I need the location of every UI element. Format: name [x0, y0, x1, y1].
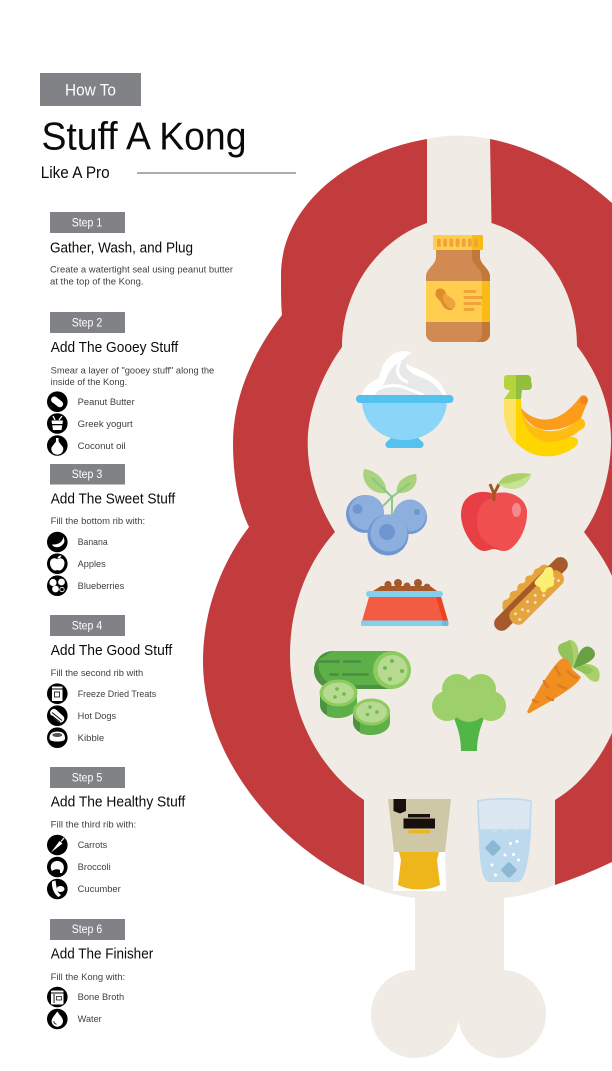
step 5	[47, 767, 186, 899]
item: peanut butter	[47, 391, 135, 412]
icon: water glass	[478, 799, 531, 882]
icon: peanut butter jar	[426, 235, 490, 342]
item: blueberries: Blueberries	[78, 581, 125, 591]
step 4: Add The Good Stuff	[51, 642, 173, 659]
kong beige interior and bone	[290, 136, 612, 1014]
title: Stuff A Kong	[42, 115, 246, 158]
icon: greek yogurt bowl	[356, 351, 454, 448]
step 5: Step 5	[72, 771, 102, 785]
kong silhouette	[203, 136, 612, 1058]
bone knob left	[371, 970, 459, 1058]
item: broccoli: Broccoli	[78, 862, 111, 872]
item: coconut oil	[47, 435, 126, 456]
step 3	[47, 464, 176, 596]
bone knob right	[458, 970, 546, 1058]
item: freeze dried treats: Freeze Dried Treats	[78, 689, 157, 699]
how to badge	[40, 73, 141, 106]
icon: kibble bowl	[361, 579, 448, 626]
item: apples: Apples	[78, 559, 106, 569]
step 1: Step 1	[72, 216, 102, 230]
step 2: Step 2	[72, 316, 102, 330]
kong red outer body	[203, 139, 612, 885]
icon: bone broth carton	[388, 799, 451, 891]
step 6: Add The Finisher	[51, 946, 153, 963]
step 3: Add The Sweet Stuff	[51, 490, 176, 507]
icon: cucumber	[314, 651, 411, 735]
icon: apple	[461, 473, 531, 551]
step 4: Step 4	[72, 619, 102, 633]
item: hot dogs: Hot Dogs	[78, 711, 117, 721]
step 1	[50, 212, 233, 287]
subtitle: Like A Pro	[41, 164, 110, 182]
item: banana: Banana	[78, 537, 108, 547]
item: water: Water	[78, 1014, 102, 1024]
step 4	[47, 615, 173, 748]
step 1: Create a watertight seal using peanut butter	[50, 265, 233, 275]
step 2: Add The Gooey Stuff	[51, 339, 179, 356]
item: bone broth: Bone Broth	[78, 992, 124, 1002]
step 2	[47, 312, 214, 456]
step 2: Smear a layer of "gooey stuff" along the	[51, 365, 214, 375]
step 3: Step 3	[72, 467, 102, 481]
icon: blueberries	[346, 469, 427, 556]
icon: banana	[504, 375, 588, 456]
item: greek yogurt	[47, 413, 133, 434]
step 1: Gather, Wash, and Plug	[50, 240, 193, 257]
item: coconut oil: Coconut oil	[78, 441, 126, 451]
step 6: Step 6	[72, 922, 102, 936]
icon: broccoli	[432, 674, 506, 751]
icon: carrot	[527, 640, 600, 714]
item: peanut butter: Peanut Butter	[78, 397, 135, 407]
step 3: Fill the bottom rib with:	[51, 516, 145, 526]
step 5: Add The Healthy Stuff	[51, 794, 186, 811]
step 4: Fill the second rib with	[51, 668, 143, 678]
item: cucumber: Cucumber	[78, 884, 121, 894]
step 2: inside of the Kong.	[51, 377, 127, 387]
icon: hot dog	[485, 548, 576, 639]
item: kibble: Kibble	[78, 733, 104, 743]
step 5: Fill the third rib with:	[51, 820, 136, 830]
item: carrots: Carrots	[78, 840, 108, 850]
step 6	[47, 919, 153, 1029]
item: greek yogurt: Greek yogurt	[78, 419, 133, 429]
step 1: at the top of the Kong.	[50, 277, 144, 287]
step 6: Fill the Kong with:	[51, 972, 125, 982]
how to badge: How To	[65, 82, 116, 100]
